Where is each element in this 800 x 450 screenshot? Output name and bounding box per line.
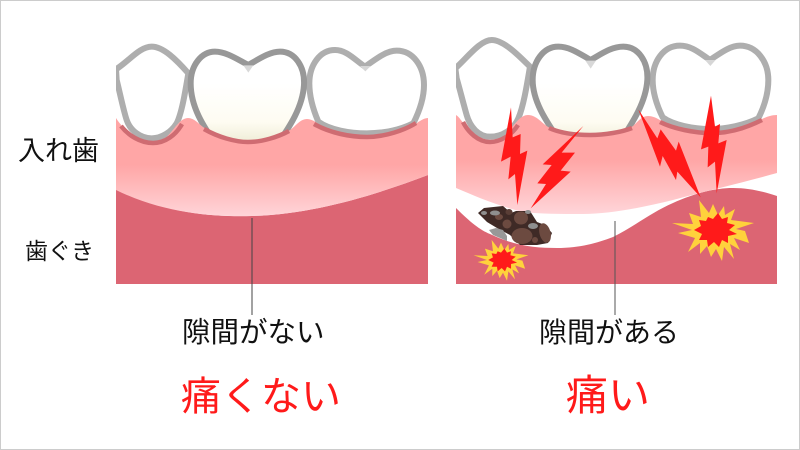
left panel gum margin [121, 123, 416, 143]
verdict: no pain: 痛くない [181, 375, 341, 419]
left panel upper gum [116, 118, 428, 216]
right panel upper gum [456, 115, 777, 214]
label: denture: 入れ歯 [18, 136, 99, 166]
caption: has no gap: 隙間がない [182, 317, 325, 349]
leader line left [251, 218, 253, 315]
label: gum: 歯ぐき [25, 238, 94, 264]
panel: without gap [116, 47, 428, 284]
small burst [474, 240, 528, 281]
bolt 4 [701, 96, 727, 193]
caption: has gap: 隙間がある [539, 317, 679, 348]
leader line right [614, 221, 616, 315]
panel: with gap [455, 40, 777, 284]
verdict: pain: 痛い [566, 372, 650, 419]
bolt 1 [501, 107, 527, 205]
right panel lower gum [456, 188, 777, 284]
right panel teeth [455, 40, 768, 142]
bolt 3 [638, 109, 701, 197]
large burst [672, 200, 754, 261]
right panel gum margin [463, 120, 762, 142]
lightning bolts [501, 96, 727, 208]
left panel teeth [116, 47, 424, 145]
plaque stones [478, 206, 553, 245]
bolt 2 [531, 126, 583, 208]
left panel lower gum [116, 175, 428, 284]
